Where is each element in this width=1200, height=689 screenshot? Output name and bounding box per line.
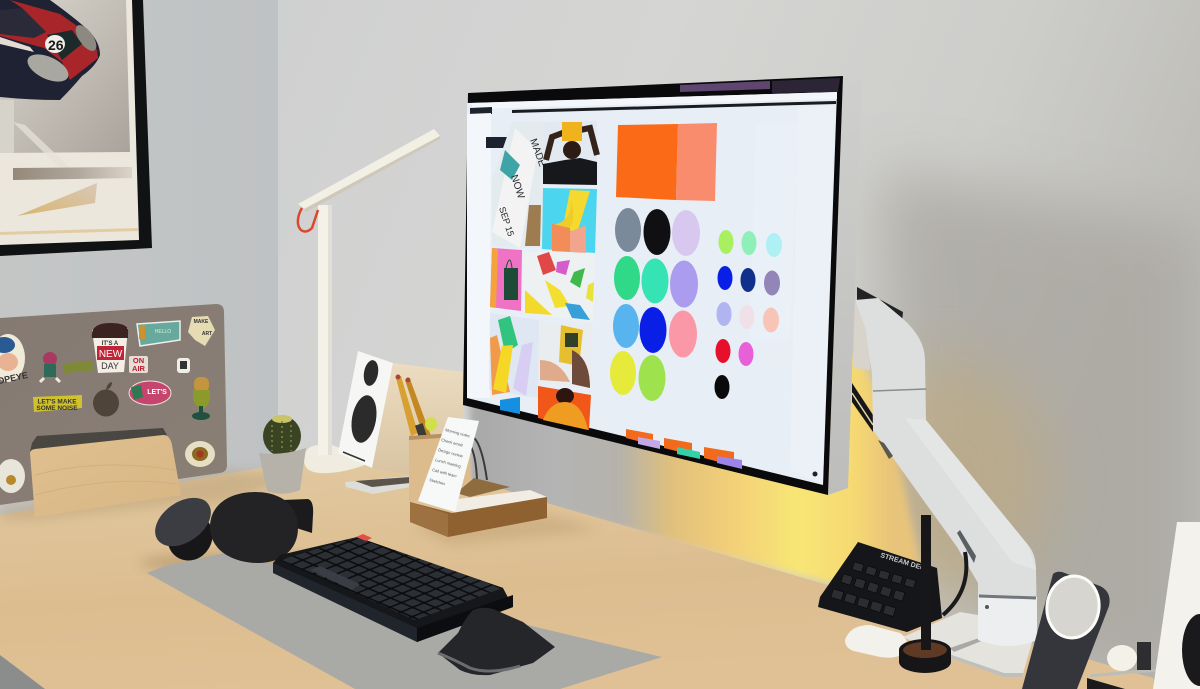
wood note tray bbox=[410, 478, 547, 537]
sticker: make art: MAKE bbox=[194, 319, 209, 325]
sticker: make art bbox=[188, 316, 215, 346]
moodboard image: poster bbox=[492, 122, 548, 248]
moodboard image: person with yellow hat bbox=[543, 121, 597, 185]
sticker: podcast label bbox=[137, 321, 180, 346]
moodboard image: poster: NOW bbox=[508, 174, 526, 201]
desk surface bbox=[0, 463, 1155, 689]
wall shadows and warm light bbox=[850, 170, 1200, 689]
stream deck: STREAM DECK bbox=[879, 552, 931, 574]
lamp base bbox=[304, 445, 365, 473]
arm cable bbox=[943, 552, 966, 615]
desk pen in holder bbox=[899, 515, 951, 673]
poster car bbox=[0, 0, 100, 100]
moodboard image: tote bag bbox=[490, 248, 522, 311]
car number: 26 bbox=[48, 37, 64, 53]
sticker: let's make some noise bbox=[33, 395, 82, 412]
monitor screen bbox=[467, 78, 840, 485]
mouse bbox=[438, 608, 555, 675]
pencils bbox=[396, 374, 437, 439]
right speaker bbox=[1153, 522, 1200, 689]
lamp red cable bbox=[298, 208, 318, 231]
sticker: let's pink oval bbox=[129, 381, 171, 405]
sticker: it's a new day cup: NEW bbox=[99, 349, 123, 360]
sticker: small shield bbox=[177, 358, 190, 373]
cactus plant bbox=[259, 415, 306, 494]
note card: Lunch meeting bbox=[435, 457, 461, 469]
headphones bbox=[210, 492, 298, 563]
arm lighter facet bbox=[905, 418, 1036, 570]
note card bbox=[418, 417, 479, 512]
speaker tweeter bbox=[362, 359, 380, 387]
sticker: small yellow label bbox=[63, 360, 93, 374]
right wall bbox=[278, 0, 1200, 689]
monitor silver side bbox=[828, 76, 862, 495]
red escape key bbox=[356, 534, 372, 541]
left wall bbox=[0, 0, 278, 520]
poster wedge bbox=[17, 183, 97, 216]
lamp bbox=[298, 129, 440, 473]
apple logo bbox=[93, 382, 119, 416]
car headlights bbox=[23, 49, 73, 87]
moodboard image: yellow bananas bbox=[542, 188, 597, 253]
desk speaker bbox=[338, 351, 463, 475]
sticker: on air: AIR bbox=[132, 364, 146, 373]
help button bbox=[812, 472, 818, 476]
right speaker woofer bbox=[1182, 614, 1200, 686]
stream deck bbox=[818, 542, 942, 632]
note card: Morning notes bbox=[445, 427, 471, 439]
earcup bbox=[146, 488, 221, 569]
laptop with stickers bbox=[0, 304, 227, 505]
headphone case strap bbox=[283, 499, 313, 533]
moodboard image: stationery bbox=[523, 252, 595, 322]
note card: Check email bbox=[441, 437, 463, 448]
speaker stand bbox=[345, 476, 410, 494]
keycaps bbox=[280, 537, 503, 620]
sticker: character bbox=[40, 352, 60, 382]
felt desk mat bbox=[147, 553, 662, 689]
moodboard image: orange sweater bbox=[538, 386, 591, 430]
sticker: on air: ON bbox=[133, 356, 144, 365]
desk shadows bbox=[0, 470, 600, 573]
moodboard image: poster: SEP 15 bbox=[497, 206, 516, 237]
arm cables bbox=[852, 383, 873, 432]
layer tooltip bbox=[486, 137, 512, 148]
note card: Call with team bbox=[432, 467, 458, 479]
arm joint ring bbox=[873, 389, 926, 391]
sticker: let's make some noise: SOME NOISE bbox=[36, 405, 78, 412]
tablet in stand bbox=[30, 428, 167, 452]
arm column bbox=[978, 596, 1037, 646]
sticker: it's a new day cup: DAY bbox=[101, 361, 119, 371]
monitor bezel bbox=[463, 76, 843, 495]
sticker: round green badge bbox=[0, 459, 25, 493]
wooden laptop stand bbox=[30, 435, 181, 517]
monitor arm bbox=[852, 287, 1037, 627]
cables behind monitor bbox=[470, 438, 487, 480]
arm silhouette bbox=[855, 298, 1037, 627]
moodboard image: colored cards bbox=[489, 313, 539, 414]
sticker: microphone bbox=[192, 377, 210, 420]
magsafe phone stand bbox=[1022, 572, 1125, 689]
sticker: popeye bbox=[0, 334, 29, 387]
moodboard image: handheld game bbox=[539, 323, 592, 390]
sticker: podcast label: HELLO bbox=[155, 329, 171, 335]
plant pot bbox=[259, 448, 306, 494]
under-monitor glow bbox=[470, 355, 930, 610]
arm base plate bbox=[903, 612, 1037, 677]
pencil holder bbox=[396, 374, 471, 503]
poster streak bbox=[13, 167, 132, 180]
sticker: it's a new day cup: IT'S A bbox=[102, 341, 119, 347]
sticker: on air bbox=[129, 356, 148, 373]
note card: Sketches bbox=[429, 477, 446, 486]
moodboard image: poster: MADE bbox=[527, 137, 548, 168]
charger ring bbox=[1043, 573, 1103, 641]
keyboard bbox=[273, 534, 513, 642]
airpods case bbox=[845, 625, 907, 658]
framed poster bbox=[0, 0, 152, 256]
floor corner bbox=[0, 655, 45, 689]
sticker: let's pink oval: LET'S bbox=[147, 389, 167, 396]
speaker woofer bbox=[348, 393, 380, 445]
monitor bbox=[463, 76, 862, 495]
orange colour block bbox=[616, 123, 717, 201]
note card: Design review bbox=[438, 447, 463, 458]
sticker: it's a new day cup bbox=[92, 323, 128, 373]
sticker: make art: ART bbox=[202, 331, 212, 337]
colour swatches large bbox=[610, 208, 700, 401]
bottom colour blocks bbox=[626, 429, 742, 469]
spacebar bbox=[310, 566, 360, 590]
colour swatches small bbox=[714, 230, 782, 399]
watch charger and cable bbox=[1090, 642, 1160, 676]
stream deck keys bbox=[831, 562, 916, 617]
cactus bbox=[263, 415, 301, 456]
sticker: round badge bbox=[185, 441, 215, 467]
sticker: let's make some noise: LET'S MAKE bbox=[37, 398, 77, 406]
